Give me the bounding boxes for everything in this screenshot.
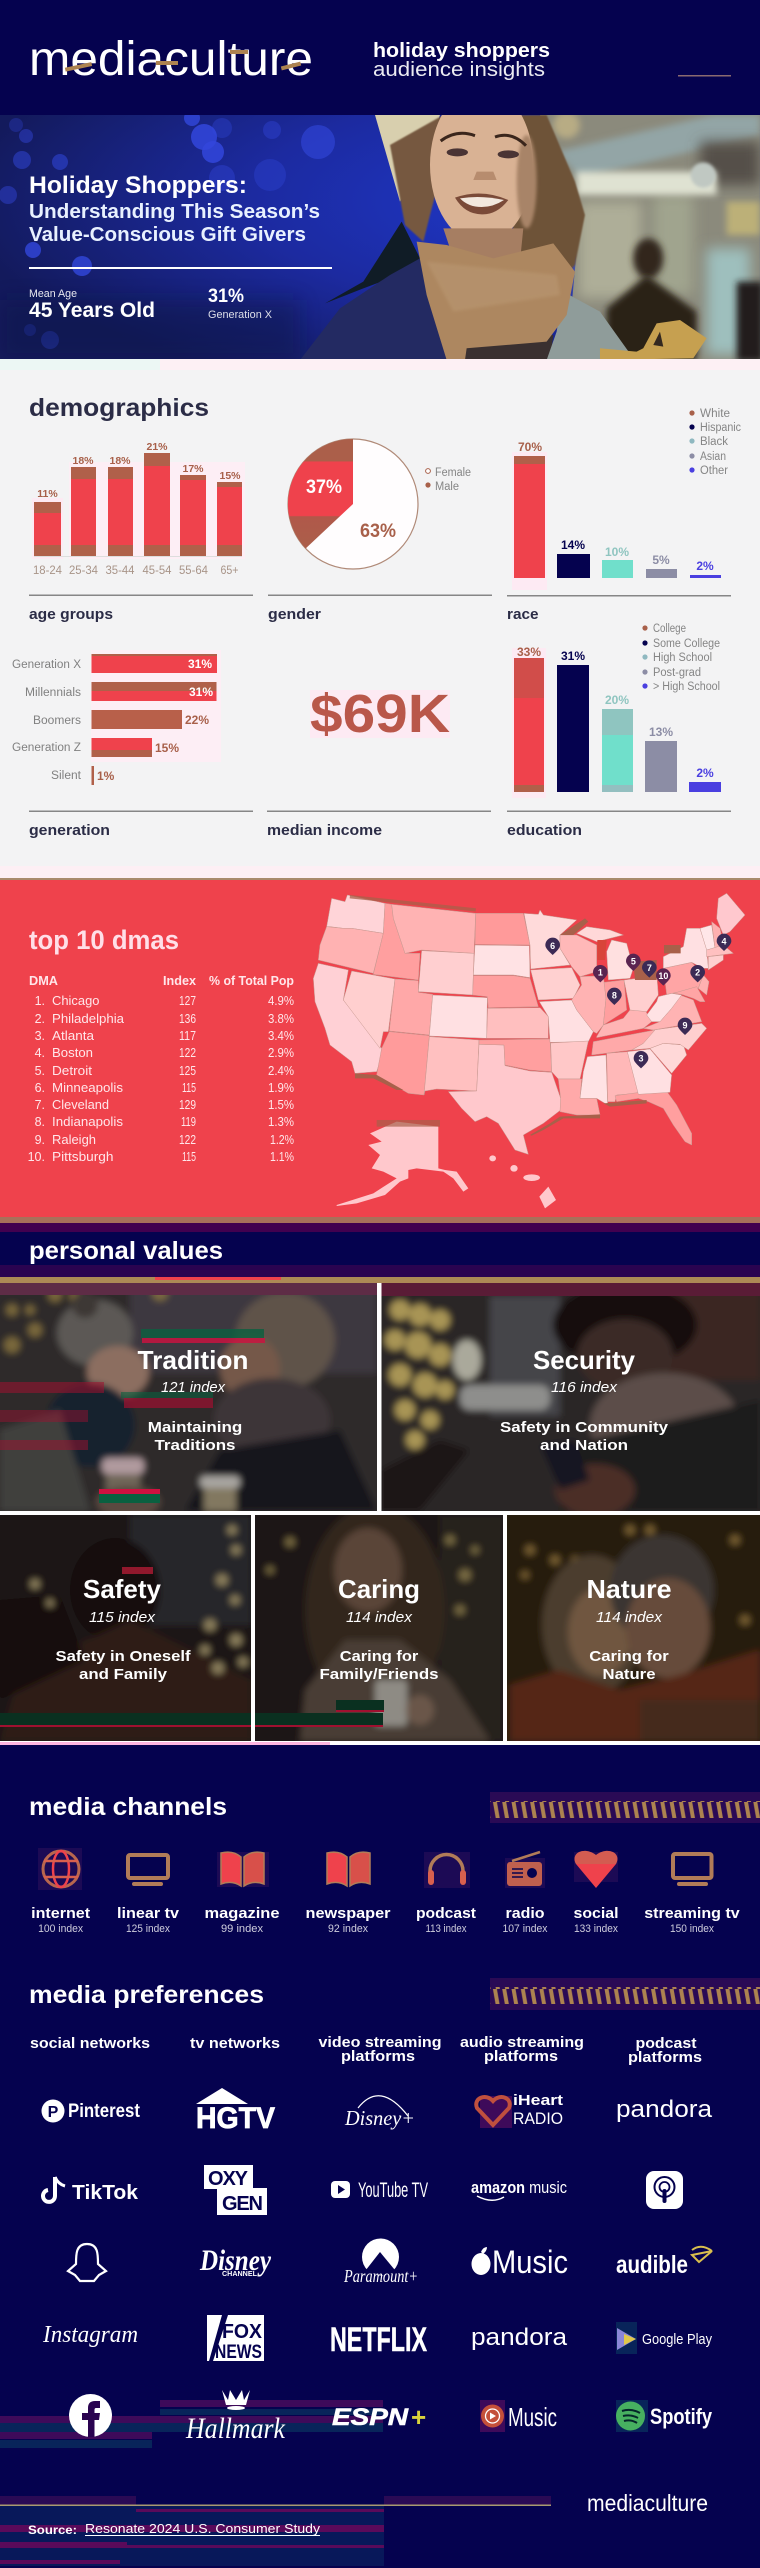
icon: podcast headphones	[424, 1852, 470, 1888]
legend: race: White	[700, 408, 730, 420]
column headings: podcast	[636, 2036, 697, 2052]
logo: iheart radio: RADIO	[513, 2109, 563, 2128]
column headings: audio streaming	[460, 2035, 584, 2051]
stat: median income: $69K	[310, 684, 450, 744]
map: united states: 6	[550, 941, 555, 951]
chart: race: 10%	[605, 545, 629, 559]
panel: personal values	[0, 1223, 760, 1750]
table: dma rankings: 2.9%	[268, 1046, 294, 1060]
chart: age groups: 18%	[72, 455, 94, 467]
chart: age groups: 65+	[220, 565, 239, 577]
logo: apple podcasts	[646, 2171, 683, 2209]
logo: oxygen: GEN	[222, 2193, 263, 2215]
logo: tiktok: TikTok	[72, 2182, 139, 2204]
logo: audible: audible	[616, 2251, 688, 2279]
table: dma rankings: % of Total Pop	[209, 973, 294, 988]
heading: media channels: media channels	[29, 1793, 227, 1821]
table: dma rankings: Atlanta	[52, 1029, 94, 1043]
header title: audience insights	[373, 59, 545, 81]
table: dma rankings: Boston	[52, 1046, 93, 1060]
channel labels: radio	[506, 1906, 545, 1922]
table: dma rankings: 1.5%	[268, 1098, 294, 1112]
table: dma rankings: 1.	[35, 994, 45, 1008]
heading: top 10 dmas: top 10 dmas	[29, 925, 179, 955]
chart: age groups	[32, 441, 245, 577]
logo: fox news: FOX	[222, 2321, 263, 2343]
icon: streaming tv	[673, 1854, 712, 1886]
chart: age groups: 11%	[37, 488, 58, 500]
card: caring: Caring	[338, 1574, 420, 1604]
icon: magazine	[217, 1852, 269, 1887]
column headings: platforms	[341, 2049, 415, 2065]
table: dma rankings: 2.	[35, 1012, 45, 1026]
logo: google play	[616, 2322, 712, 2354]
channel labels: podcast	[416, 1906, 476, 1922]
legend: race: Other	[700, 465, 728, 477]
channel labels: newspaper	[306, 1906, 391, 1922]
hero text: Holiday Shoppers:	[29, 172, 247, 199]
chart: generation: Silent	[51, 770, 82, 782]
logo: amazon music: amazon music	[471, 2178, 567, 2197]
hero photo: woman with scarf	[301, 115, 760, 359]
card: tradition	[0, 1275, 387, 1520]
logo: disney plus: Disney+	[344, 2106, 415, 2130]
table: dma rankings: Index	[163, 973, 197, 988]
chart: generation: 15%	[155, 741, 179, 755]
card: nature	[507, 1515, 760, 1741]
table: dma rankings: 117	[179, 1029, 196, 1043]
channel labels: 133 index	[574, 1923, 618, 1935]
card: security: and Nation	[540, 1437, 628, 1454]
table: dma rankings	[28, 973, 294, 1164]
chart: generation: 31%	[188, 657, 212, 671]
logo: spotify: Spotify	[650, 2404, 713, 2429]
hero text	[29, 172, 332, 322]
channel labels: linear tv	[117, 1906, 179, 1922]
card: caring: 114 index	[346, 1609, 413, 1626]
logo: oxygen	[204, 2165, 267, 2215]
card: caring: Caring for	[340, 1648, 418, 1665]
logo: instagram: Instagram	[42, 2322, 138, 2348]
card: safety: 115 index	[89, 1609, 156, 1626]
channel labels: magazine	[204, 1906, 280, 1922]
stat: mean age: Mean Age	[29, 288, 77, 300]
map: united states: 3	[638, 1054, 643, 1064]
legend: education: College	[653, 623, 686, 635]
table: dma rankings: 122	[179, 1046, 196, 1060]
logo: youtube music	[480, 2400, 557, 2432]
legend: race	[689, 408, 741, 477]
logo: espn plus: ESPN	[332, 2404, 409, 2431]
legend: gender: Male	[435, 481, 459, 493]
stat: generation: Generation X	[208, 309, 273, 321]
table: dma rankings: Raleigh	[52, 1133, 96, 1147]
chart: age groups: 21%	[146, 441, 168, 453]
channel labels	[31, 1906, 740, 1935]
card: safety: Safety	[83, 1574, 162, 1604]
column headings: tv networks	[190, 2036, 280, 2052]
chart: gender pie: 63%	[360, 521, 396, 542]
header title: holiday shoppers	[373, 40, 550, 62]
table: dma rankings: 1.1%	[270, 1150, 294, 1164]
card: tradition: Traditions	[154, 1437, 236, 1454]
logo: youtube tv: YouTube TV	[358, 2179, 428, 2202]
map: united states: 9	[682, 1020, 687, 1030]
label: race: race	[507, 606, 538, 623]
chart: generation: 22%	[185, 713, 209, 727]
heading: media preferences: media preferences	[29, 1981, 264, 2009]
chart: age groups: 35-44	[106, 565, 135, 577]
logo: pinterest	[42, 2100, 141, 2122]
chart: race: 14%	[561, 538, 585, 552]
channel labels: 99 index	[221, 1923, 263, 1935]
table: dma rankings: 1.9%	[268, 1081, 294, 1095]
table: dma rankings: Cleveland	[52, 1098, 109, 1112]
icon: social heart	[574, 1851, 618, 1888]
chart: race	[512, 408, 741, 590]
logo: youtube music: Music	[508, 2402, 557, 2432]
logo: pandora: pandora	[471, 2324, 568, 2351]
header title	[373, 40, 550, 81]
footer	[0, 2490, 708, 2566]
logo: paramount plus	[343, 2238, 418, 2286]
heading: personal values: personal values	[29, 1237, 223, 1265]
logo: snapchat	[68, 2244, 106, 2281]
chart: age groups: 18%	[109, 455, 131, 467]
card: safety: and Family	[79, 1666, 168, 1683]
card: safety: Safety in Oneself	[56, 1648, 192, 1665]
icon: newspaper	[327, 1852, 370, 1886]
column headings: platforms	[628, 2050, 702, 2066]
logo: facebook	[69, 2394, 112, 2437]
card: tradition: 121 index	[161, 1379, 225, 1396]
table: dma rankings: 6.	[35, 1081, 45, 1095]
label: age groups: age groups	[29, 606, 113, 623]
table: dma rankings: Pittsburgh	[52, 1150, 114, 1164]
chart: age groups: 15%	[219, 470, 241, 482]
table: dma rankings: 3.4%	[268, 1029, 294, 1043]
table: dma rankings: Indianapolis	[52, 1115, 123, 1129]
legend: race: Hispanic	[700, 422, 741, 434]
logo: google play: Google Play	[642, 2331, 712, 2348]
chart: education: 2%	[696, 766, 714, 780]
table: dma rankings: 125	[179, 1064, 196, 1078]
column headings: social networks	[30, 2036, 150, 2052]
chart: generation: 31%	[189, 685, 213, 699]
panel: media channels	[0, 1745, 760, 2060]
legend: education: > High School	[653, 681, 720, 693]
source line: Source:	[28, 2523, 77, 2537]
stat: generation: 31%	[208, 286, 244, 307]
channel labels: 113 index	[426, 1923, 467, 1935]
table: dma rankings: 119	[181, 1115, 196, 1129]
chart: education	[512, 623, 721, 798]
logo: disney plus	[344, 2096, 415, 2130]
chart: race: 5%	[652, 553, 670, 567]
hero text: Understanding This Season’s	[29, 200, 320, 223]
logo: fox news	[207, 2315, 264, 2363]
table: dma rankings: 5.	[35, 1064, 45, 1078]
table: dma rankings: 122	[179, 1133, 196, 1147]
footer logo: mediaculture	[587, 2490, 708, 2516]
legend: education	[642, 623, 720, 693]
label: generation: generation	[29, 822, 110, 839]
logo: hallmark	[185, 2390, 286, 2445]
chart: generation: Generation X	[12, 659, 81, 671]
channel labels: internet	[31, 1906, 90, 1922]
table: dma rankings: 2.4%	[268, 1064, 294, 1078]
chart: gender pie: 37%	[306, 477, 342, 498]
logo: apple music: Music	[492, 2244, 568, 2280]
legend: race: Black	[700, 436, 728, 448]
logo: hgtv: HGTV	[196, 2102, 275, 2135]
logo: mediaculture: mediaculture	[29, 33, 313, 86]
card: nature: Nature	[602, 1666, 656, 1683]
label: gender: gender	[268, 606, 321, 623]
chart: education: 13%	[649, 725, 673, 739]
table: dma rankings: 127	[179, 994, 196, 1008]
source line: Resonate 2024 U.S. Consumer Study	[85, 2521, 321, 2536]
chart: age groups: 17%	[182, 463, 204, 475]
map: united states: 7	[647, 963, 652, 973]
card: security: Safety in Community	[500, 1419, 669, 1436]
column headings	[30, 2035, 702, 2066]
hero text: Value-Conscious Gift Givers	[29, 223, 306, 246]
legend: gender	[425, 467, 471, 493]
logo: netflix: NETFLIX	[330, 2321, 427, 2359]
label: median income: median income	[267, 822, 382, 839]
logo: pinterest: P	[48, 2104, 59, 2121]
table: dma rankings: 3.8%	[268, 1012, 294, 1026]
logo: paramount plus: Paramount+	[343, 2266, 418, 2286]
logo: espn plus: +	[411, 2402, 426, 2432]
table: dma rankings: 115	[182, 1150, 196, 1164]
card: caring	[255, 1515, 503, 1741]
glitch stripes behind logos	[0, 2400, 383, 2448]
logo: iheart radio	[476, 2092, 563, 2128]
logo: espn plus	[332, 2402, 426, 2432]
panel: top 10 dmas	[0, 878, 760, 1223]
logo: hgtv	[196, 2088, 275, 2135]
channel labels: social	[574, 1906, 618, 1922]
label: education: education	[507, 822, 582, 839]
column headings: platforms	[484, 2049, 558, 2065]
logo: disney channel: Disney	[199, 2244, 272, 2277]
chart: age groups: 25-34	[69, 565, 99, 577]
table: dma rankings: 1.2%	[270, 1133, 294, 1147]
chart: generation: Generation Z	[12, 742, 81, 754]
chart: generation: Boomers	[33, 715, 81, 727]
card: security	[370, 1275, 760, 1520]
logo: tiktok	[43, 2177, 139, 2204]
legend: race: Asian	[700, 451, 726, 463]
stat: mean age	[29, 288, 155, 322]
chart: race: 2%	[696, 559, 714, 573]
heading: demographics: demographics	[29, 394, 209, 422]
logo: pinterest: Pinterest	[68, 2101, 141, 2122]
table: dma rankings: Chicago	[52, 994, 100, 1008]
legend: education: Post-grad	[653, 667, 701, 679]
stat: mean age: 45 Years Old	[29, 299, 155, 322]
legend: education: High School	[653, 652, 712, 664]
logo: disney channel: CHANNEL	[222, 2271, 258, 2278]
map pins	[545, 934, 731, 1068]
chart: education: 31%	[561, 649, 585, 663]
channel labels: streaming tv	[644, 1906, 740, 1922]
chart: generation	[12, 650, 221, 785]
map: united states: 5	[631, 956, 636, 966]
chart: education: 33%	[517, 645, 541, 659]
card: safety	[0, 1515, 251, 1741]
map: united states: 2	[695, 968, 700, 978]
card: nature: 114 index	[596, 1609, 663, 1626]
hero banner	[0, 115, 760, 359]
icon: radio	[505, 1852, 545, 1888]
card: nature: Caring for	[589, 1648, 669, 1665]
logo: oxygen: OXY	[208, 2168, 249, 2190]
panel: demographics	[0, 359, 760, 878]
table: dma rankings: Detroit	[52, 1064, 93, 1078]
channel labels: 92 index	[328, 1923, 368, 1935]
table: dma rankings: 10.	[28, 1150, 45, 1164]
logo: pandora: pandora	[616, 2096, 713, 2123]
chart: generation: 1%	[97, 769, 115, 783]
map: united states: 4	[721, 936, 726, 946]
panel: media preferences	[0, 1978, 760, 2448]
chart: age groups: 45-54	[142, 565, 172, 577]
footer glitch stripes	[0, 2496, 551, 2566]
table: dma rankings: 1.3%	[268, 1115, 294, 1129]
chart: age groups: 18-24	[33, 565, 63, 577]
table: dma rankings: 129	[179, 1098, 196, 1112]
map: united states: 1	[598, 968, 603, 978]
table: dma rankings: 4.	[35, 1046, 45, 1060]
hero bokeh	[0, 110, 335, 349]
stat: generation	[208, 286, 273, 321]
column headings: video streaming	[318, 2035, 442, 2051]
table: dma rankings: 8.	[35, 1115, 45, 1129]
chart: education: 20%	[605, 693, 629, 707]
chart: gender pie	[288, 439, 471, 569]
table: dma rankings: Minneapolis	[52, 1081, 123, 1095]
chart: age groups: 55-64	[179, 565, 209, 577]
channel labels: 100 index	[38, 1923, 84, 1935]
channel labels: 150 index	[670, 1923, 714, 1935]
table: dma rankings: 7.	[35, 1098, 45, 1112]
table: dma rankings: 3.	[35, 1029, 45, 1043]
table: dma rankings: 115	[182, 1081, 196, 1095]
table: dma rankings: 136	[179, 1012, 196, 1026]
lake and coast shadow bands	[350, 895, 681, 1136]
channel labels: 125 index	[126, 1923, 170, 1935]
logo: spotify	[616, 2400, 713, 2432]
card: security: Security	[533, 1345, 636, 1375]
table: dma rankings: Philadelphia	[52, 1012, 124, 1026]
logo: youtube tv	[331, 2179, 428, 2202]
table: dma rankings: 4.9%	[268, 994, 294, 1008]
legend: gender: Female	[435, 467, 471, 479]
icon: linear tv	[128, 1855, 168, 1886]
chart: race: 70%	[518, 440, 542, 454]
map: united states: 10	[658, 971, 668, 981]
legend: education: Some College	[653, 638, 720, 650]
chart: generation: Millennials	[25, 687, 81, 699]
card: tradition: Tradition	[138, 1345, 248, 1375]
card: nature: Nature	[586, 1574, 672, 1604]
logo: hallmark: Hallmark	[185, 2412, 286, 2445]
card: security: 116 index	[551, 1379, 618, 1396]
card: tradition: Maintaining	[148, 1419, 242, 1436]
map: united states	[313, 893, 745, 1208]
logo: fox news: NEWS	[215, 2342, 262, 2363]
table: dma rankings: DMA	[29, 973, 59, 988]
map: united states: 8	[612, 990, 617, 1000]
table: dma rankings: 9.	[35, 1133, 45, 1147]
card: caring: Family/Friends	[320, 1666, 438, 1683]
icon: internet	[38, 1848, 82, 1890]
header band	[0, 0, 760, 115]
channel labels: 107 index	[502, 1923, 548, 1935]
source line	[28, 2521, 321, 2537]
logo: iheart radio: iHeart	[513, 2092, 563, 2109]
